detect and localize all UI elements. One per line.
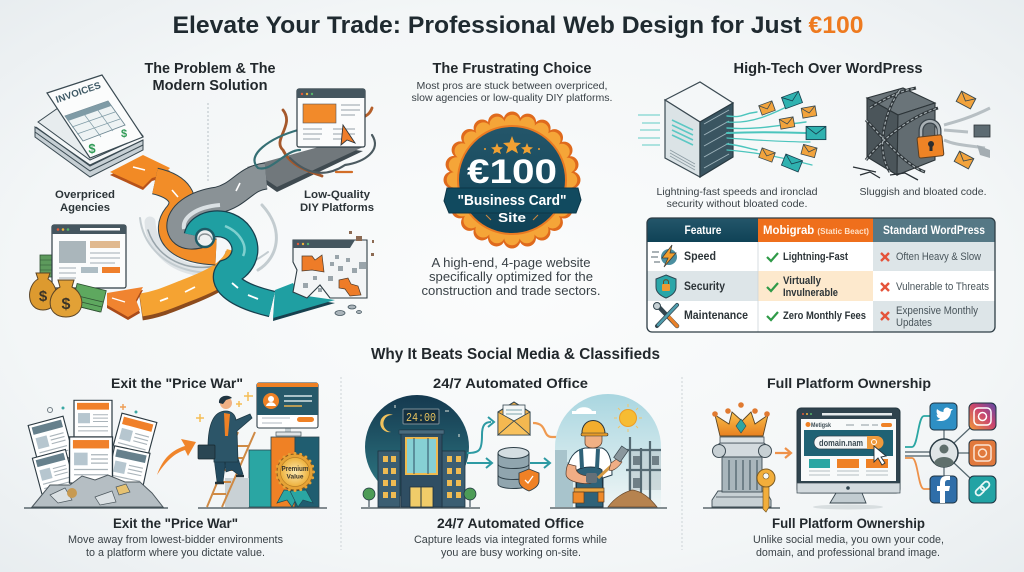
table header xyxy=(684,223,985,237)
icon: database with shield xyxy=(498,448,539,491)
icon: camera app xyxy=(969,440,996,466)
description: domain, and professional brand image. xyxy=(756,547,940,559)
description text: construction and trade sectors. xyxy=(422,283,600,298)
panel: the problem and the modern solution xyxy=(30,61,375,321)
label: overpriced agencies: Agencies xyxy=(60,202,110,214)
icon: crowned column with key xyxy=(703,402,780,512)
heading: problem: Modern Solution xyxy=(152,78,268,94)
icon: monitor with domain search xyxy=(797,408,900,510)
caption: lightning-fast: security without bloated code. xyxy=(666,198,808,210)
illustration: climbing to premium value xyxy=(24,383,327,508)
icon: monitor with domain search: domain.nam xyxy=(819,438,863,449)
subheading bottom: Exit the "Price War" xyxy=(113,516,238,531)
panel: high-tech over wordpress xyxy=(638,60,995,332)
table wordpress column xyxy=(896,251,990,329)
description: Unlike social media, you own your code, xyxy=(753,534,944,546)
icon: link xyxy=(969,476,996,503)
arrow: teal to worker xyxy=(530,458,550,468)
table row labels xyxy=(684,251,866,322)
table wordpress column: Expensive Monthly xyxy=(896,305,979,317)
table wordpress column: Updates xyxy=(896,317,933,329)
table header: Standard WordPress xyxy=(883,223,985,237)
icon: tools xyxy=(654,302,677,326)
road: orange top xyxy=(110,155,216,252)
road: grey xyxy=(180,143,363,236)
illustration: office at night xyxy=(361,395,480,508)
badge: €100 business card site: €100 xyxy=(467,153,557,191)
panel: the frustrating choice xyxy=(412,61,612,298)
intro text: Most pros are stuck between overpriced, xyxy=(416,80,608,92)
table wordpress column: Often Heavy & Slow xyxy=(896,251,981,263)
table row labels: Virtually xyxy=(783,275,821,287)
badge: €100 business card site: "Business Card" xyxy=(458,193,566,209)
dashed centre guide xyxy=(207,103,209,182)
icon: shield xyxy=(656,275,676,298)
ladder xyxy=(207,432,255,507)
road: teal xyxy=(197,224,335,321)
table row labels: Speed xyxy=(684,251,716,263)
illustration: job ads on rubble xyxy=(28,400,163,507)
icon: locked server xyxy=(853,88,990,180)
envelopes xyxy=(759,91,826,172)
premium value seal xyxy=(276,454,314,507)
icon: premium website with money: $ xyxy=(62,296,71,313)
arrow: column to monitor xyxy=(775,448,791,458)
panel: 24/7 automated office xyxy=(361,375,667,559)
icon: invoices stack xyxy=(35,75,143,177)
heading: high-tech: High-Tech Over WordPress xyxy=(734,60,922,77)
illustration: office at night: 24:00 xyxy=(406,411,436,425)
heading: frustrating choice: The Frustrating Choice xyxy=(432,61,592,77)
icon: facebook xyxy=(930,476,957,503)
description: you are busy working on-site. xyxy=(441,547,581,559)
heading: problem: The Problem & The xyxy=(144,61,276,77)
label: overpriced agencies: Overpriced xyxy=(55,189,115,201)
table header: Feature xyxy=(684,223,722,237)
icon: monitor with domain search: Metigsk xyxy=(811,423,832,429)
icon: twitter xyxy=(930,403,957,430)
table row labels: Security xyxy=(684,281,726,293)
subheading top: Exit the "Price War" xyxy=(111,375,243,391)
badge: €100 business card site: Site xyxy=(498,210,526,225)
icon: premium website with money xyxy=(30,225,126,317)
swirl centre xyxy=(196,229,214,247)
description text: A high-end, 4-page website xyxy=(432,255,590,270)
subheading top: 24/7 Automated Office xyxy=(433,375,588,391)
data streams xyxy=(727,100,812,165)
icon: instagram xyxy=(969,403,996,430)
monitor xyxy=(257,383,318,436)
icon: mail xyxy=(498,402,530,435)
icon: speed xyxy=(651,245,677,267)
icon: invoices stack: $ xyxy=(88,141,96,156)
label: low-quality diy platforms: Low-Quality xyxy=(304,189,370,201)
caption: sluggish: Sluggish and bloated code. xyxy=(860,186,986,198)
icon: person hub xyxy=(930,439,958,467)
panel: full platform ownership xyxy=(703,375,996,559)
arrow: teal to envelope xyxy=(467,417,494,453)
connectors xyxy=(905,416,970,489)
premium value seal: Value xyxy=(287,474,304,480)
description: to a platform where you dictate value. xyxy=(86,547,265,559)
icon: fast server xyxy=(638,82,733,177)
illustration: construction worker xyxy=(550,394,667,508)
businessman xyxy=(198,396,252,483)
intro text: slow agencies or low-quality DIY platforms. xyxy=(412,92,612,104)
table row labels: Zero Monthly Fees xyxy=(783,310,866,322)
arrow: teal to database xyxy=(467,458,492,468)
subheading top: Full Platform Ownership xyxy=(767,375,931,391)
premium value seal: Premium xyxy=(282,466,308,473)
icon: broken low-quality website xyxy=(293,231,374,316)
check marks xyxy=(767,253,778,320)
icon: invoices stack: INVOICES xyxy=(54,80,102,106)
icon: invoices stack: $ xyxy=(121,128,127,140)
description: Capture leads via integrated forms while xyxy=(414,534,607,546)
caption: lightning-fast: Lightning-fast speeds and ironclad xyxy=(656,186,818,198)
swirl lines xyxy=(140,205,276,273)
table wordpress column: Vulnerable to Threats xyxy=(896,281,990,293)
table header: Mobigrab (Static Beact) xyxy=(763,223,869,237)
comparison table xyxy=(647,218,995,332)
panel: exit the price war xyxy=(24,375,327,559)
arrow: up to premium xyxy=(157,439,196,475)
table row labels: Maintenance xyxy=(684,310,748,322)
road: orange bottom xyxy=(107,252,238,320)
title: Elevate Your Trade: Professional Web Design for Just €100 xyxy=(173,12,864,39)
cross marks xyxy=(881,253,889,320)
section heading: why it beats: Why It Beats Social Media & Classifieds xyxy=(371,346,660,363)
table row labels: Lightning-Fast xyxy=(783,251,848,263)
badge: €100 business card site xyxy=(444,120,581,240)
table row labels: Invulnerable xyxy=(783,287,838,299)
description text: specifically optimized for the xyxy=(429,269,593,284)
subheading bottom: 24/7 Automated Office xyxy=(437,516,584,531)
subheading bottom: Full Platform Ownership xyxy=(772,516,925,531)
description: Move away from lowest-bidder environments xyxy=(68,534,284,546)
arrow: orange to worker xyxy=(533,423,569,442)
icon: broken cables website xyxy=(254,89,375,176)
label: low-quality diy platforms: DIY Platforms xyxy=(300,202,374,214)
icon: premium website with money: $ xyxy=(39,288,48,305)
